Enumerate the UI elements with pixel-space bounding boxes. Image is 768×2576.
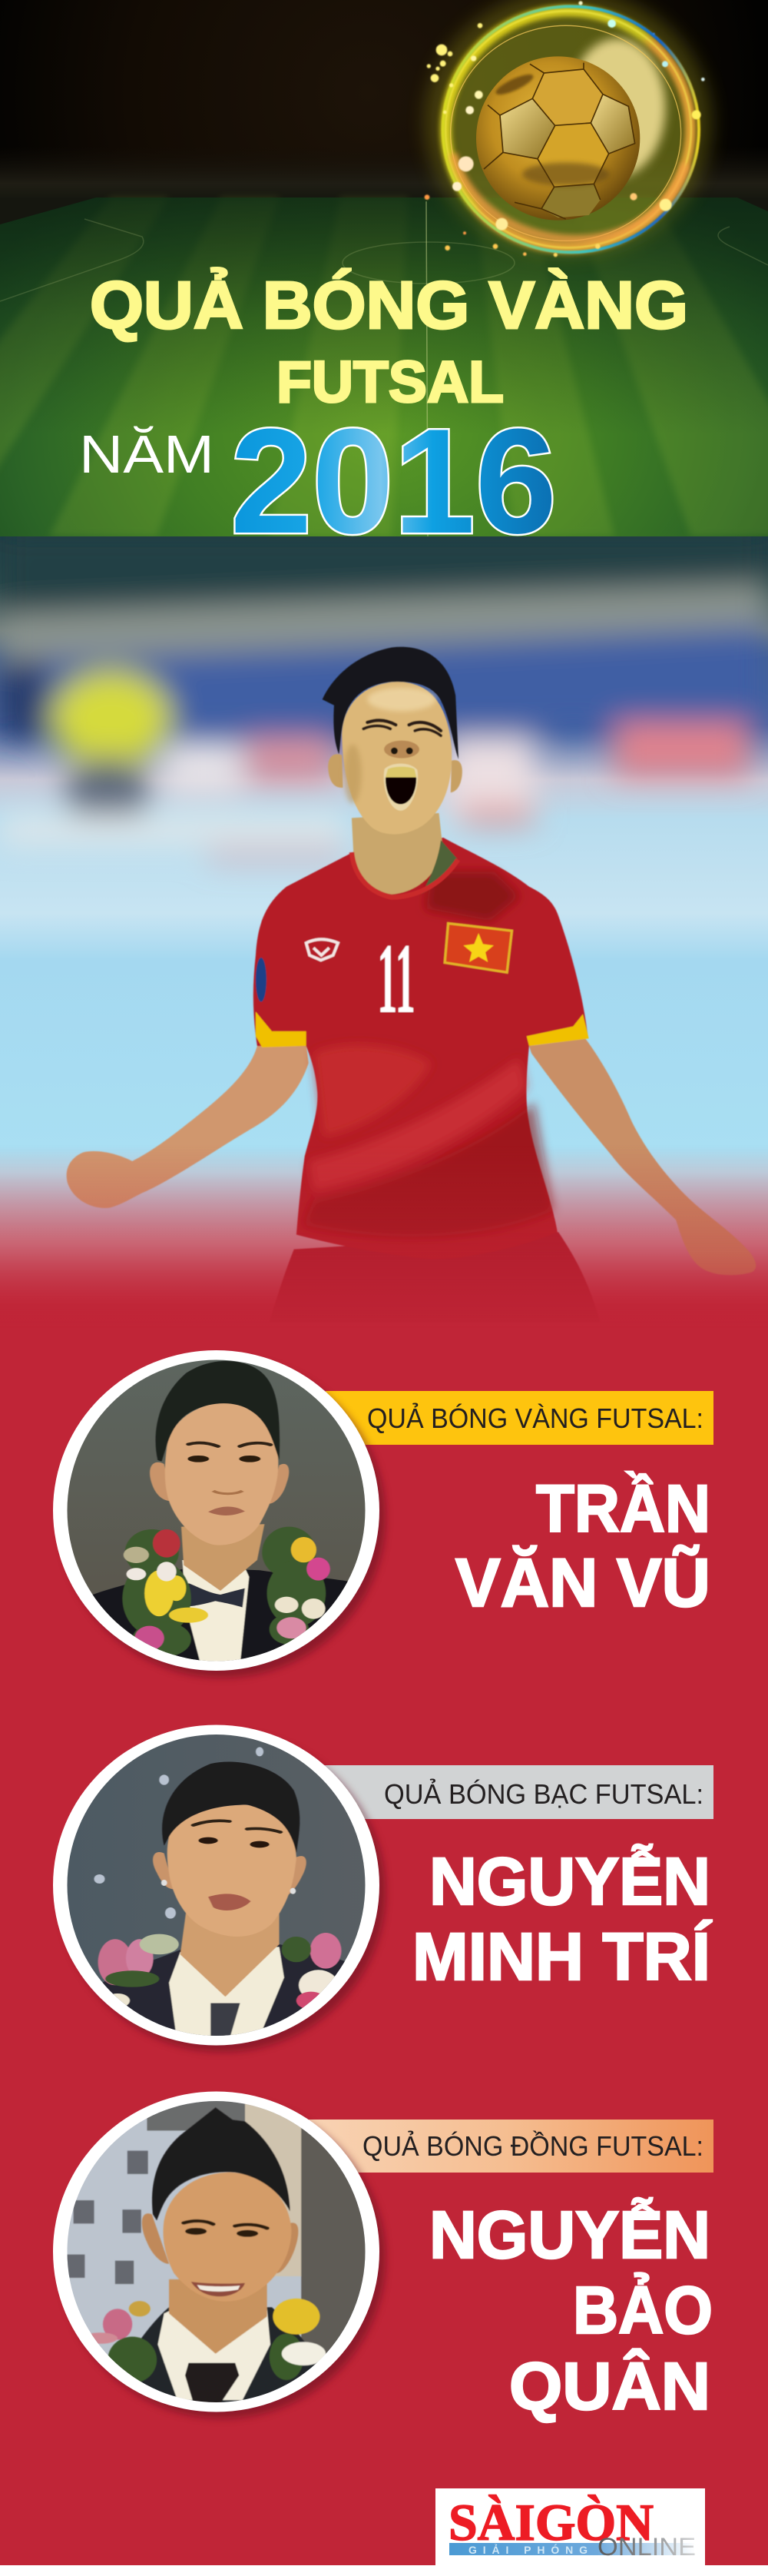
banner: gold [326,1391,713,1445]
title: Quả bóng vàng: QUẢ BÓNG VÀNG [90,268,688,343]
name: Văn Vũ: VĂN VŨ [455,1544,710,1621]
banner text: gold: QUẢ BÓNG VÀNG FUTSAL: [367,1403,703,1434]
icon: golden ball with rings [425,0,712,257]
open mouth [384,764,418,811]
logo: Sài Gòn Giải Phóng Online: GIẢI PHÓNG [468,2543,588,2556]
left arm [67,1044,309,1208]
kit logo [306,939,338,960]
title: Futsal: FUTSAL [276,350,504,415]
portrait: Nguyễn Bảo Quân [46,2090,386,2418]
shorts [277,1231,591,1299]
banner text: bronze: QUẢ BÓNG ĐỒNG FUTSAL: [362,2130,703,2162]
white strip at the bottom [0,2565,768,2576]
player figure: 11 [377,923,415,1034]
nose [384,741,419,759]
jersey [253,838,588,1259]
logo: Sài Gòn Giải Phóng Online: ONLINE [598,2533,696,2561]
name: Bảo: BẢO [573,2273,713,2348]
banner text: silver: QUẢ BÓNG BẠC FUTSAL: [384,1778,703,1810]
page background: red panel [0,1306,768,2565]
sleeve badge [256,958,266,1002]
year: 2016: 2016 [230,398,557,565]
neck [352,813,443,895]
banner: bronze [309,2120,713,2173]
logo: Sài Gòn Giải Phóng Online: SÀIGÒN [449,2493,654,2551]
banner: silver [323,1765,713,1819]
label: năm: NĂM [79,424,214,484]
flag [445,924,512,972]
name: Nguyễn: NGUYỄN [429,1844,710,1919]
panel: header stadium [0,0,768,565]
panel: player photo [0,530,768,1329]
name: Minh Trí: MINH TRÍ [412,1920,713,1994]
name: Trần: TRẦN [536,1472,710,1546]
right arm [529,1038,756,1275]
name: Nguyễn: NGUYỄN [429,2197,710,2272]
collar [352,852,458,898]
yellow cuffs [256,1011,306,1047]
name: Quân: QUÂN [509,2349,710,2424]
hair [323,647,458,759]
face [342,682,452,835]
brows and eyes [363,720,441,735]
portrait: Nguyễn Minh Trí [46,1725,386,2052]
portrait: Trần Văn Vũ [46,1350,386,1681]
ears [328,754,343,788]
player figure [67,647,756,1322]
logo: Sài Gòn Giải Phóng Online [435,2488,705,2565]
